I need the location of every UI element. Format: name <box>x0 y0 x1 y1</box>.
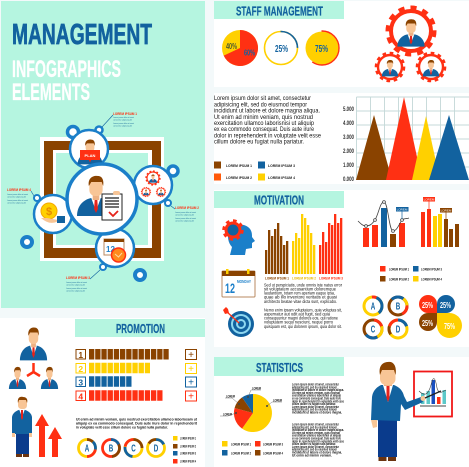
icon: coin in hand <box>34 195 72 233</box>
combo chart: LOREM <box>397 208 408 212</box>
legend: LOREM IPSUM 3 <box>268 164 295 168</box>
promotion legend: LOREM IPSUM 1 <box>180 436 196 440</box>
triangle chart <box>343 97 469 183</box>
promotion legend: LOREM IPSUM 3 <box>180 452 196 456</box>
ring letters: C <box>371 324 375 336</box>
statistics text column one: dolor in reprehenderit in voluptate velit esse <box>292 399 344 403</box>
presentation board <box>414 372 452 416</box>
ring c <box>125 440 142 456</box>
callout: lorem ipsum 1: Lorem ipsum dolor sit amet <box>113 116 134 119</box>
ring d <box>389 320 407 338</box>
panel: staff management <box>214 1 469 87</box>
heading: promotion <box>75 319 205 337</box>
ring c <box>364 320 382 338</box>
progress row 2: 2 <box>78 364 83 374</box>
statistics text column one: incididunt ut labore et dolore magna. <box>292 410 342 414</box>
body text: exercitation ullamco laborisnisi ut aliquip <box>214 121 315 127</box>
callout: lorem ipsum 1: LOREM IPSUM 1 <box>113 112 137 116</box>
progress row 4: 4 <box>78 391 83 401</box>
callout: lorem ipsum 4: consectetur adipiscing elit <box>7 196 26 198</box>
callout: lorem ipsum 4 <box>7 188 31 204</box>
callout: lorem ipsum 1: consectetur adipiscing elit <box>113 118 132 122</box>
callout: lorem ipsum 1 <box>113 112 137 128</box>
progress row 2 <box>76 364 196 375</box>
motivation paragraph one: Sed ut perspiciatis, unde omnis iste natus error <box>264 282 343 288</box>
progress row 1: 1 <box>78 350 83 360</box>
bar labels: LOREM IPSUM 2 <box>292 276 316 280</box>
ring letters: B <box>396 302 400 312</box>
callout: lorem ipsum 2: consectetur adipiscing elit <box>175 220 194 222</box>
motivation paragraph two: quisquam est, qui dolorem ipsum, quia dolor sit. <box>264 324 342 329</box>
chart legend: LOREM IPSUM 4 <box>421 278 442 282</box>
ring chart: 25 percent: 25% <box>275 44 288 55</box>
pie chart: 40 and 60 percent: 60% <box>244 48 255 58</box>
body text: adipisicing elit, sed do eiusmod tempor <box>214 102 307 108</box>
legend: LOREM IPSUM 4 <box>268 176 295 180</box>
petal chart: 25% <box>422 318 433 328</box>
statistics text column one: incididunt ut labore et dolore magna aliqua. <box>292 388 344 392</box>
body text <box>214 96 322 146</box>
icon: calendar: 12 <box>225 280 235 296</box>
ring letters: C <box>131 444 136 454</box>
ring letters: A <box>371 302 375 312</box>
callout: lorem ipsum 4: consectetur adipiscing elit <box>7 202 26 204</box>
triangle chart: 2.000 <box>343 149 354 155</box>
panel: text and triangle chart <box>214 93 469 184</box>
bar labels: LOREM IPSUM 1 <box>265 276 289 280</box>
chart legend: LOREM IPSUM 2 <box>389 278 409 282</box>
callout leaders <box>31 115 175 279</box>
icon: team gears <box>134 166 172 204</box>
callout: lorem ipsum 3: Lorem ipsum dolor sit amet <box>66 281 87 284</box>
statistics text column two: Ut enim ad minim veniam, quis nostrud <box>292 431 340 435</box>
heading: statistics: STATISTICS <box>256 360 303 375</box>
statistics text column one: exercitation ullamco laborisnisi ut aliquip <box>292 394 341 398</box>
icon: calendar and clock: 12 <box>106 245 115 254</box>
body text: incididunt ut labore et dolore magna aliqua. <box>214 108 320 114</box>
promotion text block <box>76 418 198 430</box>
bar labels <box>265 276 343 280</box>
ring letters <box>85 444 158 454</box>
callout: lorem ipsum 2: Lorem ipsum dolor sit amet <box>175 211 196 214</box>
promotion legend: LOREM IPSUM 4 <box>180 460 196 464</box>
ring letters: B <box>109 444 113 454</box>
statistics text column two: ex ea commodo consequat. Duis aute irure <box>292 436 341 440</box>
callout: lorem ipsum 3: consectetur adipiscing elit <box>66 290 85 292</box>
progress row 1: + <box>188 350 194 361</box>
triangle chart: 3.000 <box>343 135 354 141</box>
square frame <box>40 137 164 261</box>
statistics text column one: cillum dolore eu fugiat nulla pariatur. <box>292 402 336 406</box>
icon: plan manager <box>70 130 108 168</box>
ring letters: A <box>85 444 89 454</box>
callout: lorem ipsum 3: consectetur adipiscing elit <box>66 284 85 286</box>
bar labels: LOREM IPSUM 3 <box>319 276 343 280</box>
body text: cillum dolore eu fugiat nulla pariatur. <box>214 140 304 146</box>
icon: target <box>223 307 254 337</box>
bar chart: brown <box>265 223 288 274</box>
promotion legend: LOREM IPSUM 2 <box>180 444 196 448</box>
heading: staff management <box>214 1 344 19</box>
statistics text column two <box>292 422 344 457</box>
triangle chart: 1.000 <box>343 163 354 169</box>
heading: staff management: STAFF MANAGEMENT <box>236 4 323 18</box>
promotion text block: aliquip ex ea commodo consequat. Duis aute irure dolor in reprehenderit <box>76 422 198 426</box>
panel: motivation <box>214 190 469 347</box>
statistics text column two: adipisicing elit, sed do eiusmod tempor <box>292 448 337 452</box>
pie chart: 40 and 60 percent: 40% <box>226 42 237 51</box>
ring letters: D <box>154 444 158 454</box>
triangle chart: 4.000 <box>343 121 354 127</box>
pie chart: LOREM <box>252 386 261 390</box>
callout bar chart: LOREM <box>424 198 435 202</box>
icon: calendar: MONDAY <box>237 279 251 284</box>
callout: lorem ipsum 3: Lorem ipsum dolor sit amet <box>66 287 87 290</box>
presenter <box>371 362 441 461</box>
icon: standing man <box>12 397 32 457</box>
statistics text column two: Lorem ipsum dolor sit amet, consectetur <box>292 422 339 426</box>
pie chart: LOREM <box>223 412 232 416</box>
statistics text column two: incididunt ut labore et dolore magna aliqua. <box>292 428 344 432</box>
pie legend: LOREM IPSUM 4 <box>263 452 283 456</box>
callout: lorem ipsum 2 <box>175 206 199 222</box>
promotion legend <box>173 436 196 464</box>
body text: Lorem ipsum dolor sit amet, consectetur <box>214 96 311 102</box>
decorative rings <box>22 126 178 280</box>
legend: LOREM IPSUM 1 <box>226 164 252 168</box>
ring a <box>78 440 96 456</box>
motivation paragraph two: consequuntur magni dolores eos, qui ratione <box>264 316 339 320</box>
petal chart: 25% <box>422 300 433 310</box>
callout: lorem ipsum 4: LOREM IPSUM 4 <box>7 188 31 192</box>
heading: motivation: MOTIVATION <box>254 192 304 208</box>
ring chart: 75 percent <box>305 31 339 65</box>
motivation paragraph one <box>264 282 343 304</box>
chart legend: LOREM IPSUM 3 <box>421 268 442 272</box>
motivation paragraph two: Nemo enim ipsam voluptatem, quia voluptas sit, <box>264 308 342 312</box>
callout bar chart <box>421 197 459 247</box>
progress row 3 <box>76 377 196 388</box>
chart legend <box>380 266 442 282</box>
bar chart: red <box>319 214 342 274</box>
progress row 2: + <box>188 364 194 375</box>
promotion text block: in voluptate velit esse cillum dolore eu fugiat nulla pariatur. <box>76 426 168 430</box>
motivation paragraph two <box>264 308 342 329</box>
statistics text column two: exercitation ullamco laborisnisi ut aliquip <box>292 434 341 438</box>
ring a <box>364 297 382 315</box>
body text: dolor in reprehenderit in voluptate velit esse <box>214 133 322 139</box>
petal chart: 25% <box>440 300 451 310</box>
ring letters: D <box>396 324 400 336</box>
statistics text column two: Ut enim ad minim veniam. <box>292 453 332 457</box>
callout: lorem ipsum 3: LOREM IPSUM 3 <box>66 276 90 280</box>
statistics text column one <box>292 382 344 414</box>
pie chart: LOREM <box>273 398 282 402</box>
icon: coin in hand: $ <box>46 206 52 218</box>
statistics text column one: Ut enim ad minim veniam, quis nostrud <box>292 391 340 395</box>
chart legend: LOREM IPSUM 1 <box>389 268 409 272</box>
bar chart: yellow <box>292 214 315 274</box>
heading: motivation <box>214 191 344 208</box>
callout: lorem ipsum 4: Lorem ipsum dolor sit amet <box>7 193 28 196</box>
pie chart <box>220 386 282 432</box>
panel: poster <box>1 1 205 308</box>
pie chart: 40 and 60 percent <box>222 30 258 66</box>
callout: lorem ipsum 2: consectetur adipiscing elit <box>175 214 194 216</box>
statistics text column one: adipisicing elit, sed do eiusmod tempor <box>292 385 337 389</box>
progress row 4: + <box>188 392 194 402</box>
progress row 1 <box>76 350 196 361</box>
panel: promotion <box>0 318 205 467</box>
promotion text block: Ut enim ad minim veniam, quis nostrud exercitation ullamco laboriosam ut <box>76 418 198 422</box>
ring b <box>389 297 407 315</box>
combo chart <box>358 201 409 247</box>
callout: lorem ipsum 3 <box>66 276 90 292</box>
motivation paragraph one: architecto beatae vitae dicta sunt, explicabo. <box>264 299 337 304</box>
pie chart: LOREM <box>226 394 235 398</box>
statistics text column one: Lorem ipsum dolor sit amet, consectetur <box>292 405 339 409</box>
ring chart: 75 percent: 75% <box>315 44 328 55</box>
panel: statistics <box>214 357 469 467</box>
body text: ex ea commodo consequat. Duis aute irure <box>214 127 315 133</box>
statistics text column two: Lorem ipsum dolor sit amet, consectetur <box>292 445 339 449</box>
ring letters <box>371 302 400 336</box>
petal chart: 75% <box>444 321 455 331</box>
progress row 3: 3 <box>78 377 83 387</box>
subtitle line one: INFOGRAPHICS <box>12 56 121 83</box>
statistics text column one: adipisicing elit, sed do eiusmod tempor <box>292 408 337 412</box>
ring b <box>102 440 120 456</box>
callout bar chart: LOREM <box>441 208 452 212</box>
triangle chart: 5.000 <box>343 107 354 113</box>
ring d <box>148 440 164 456</box>
callout: lorem ipsum 2: Lorem ipsum dolor sit amet <box>175 217 196 220</box>
statistics text column two: adipisicing elit, sed do eiusmod tempor <box>292 425 337 429</box>
icon: calendar and clock <box>96 229 134 267</box>
subtitle line two: ELEMENTS <box>12 79 90 106</box>
icon: head with gear <box>224 220 255 255</box>
icon: central manager with document <box>67 164 137 234</box>
statistics text column two: incididunt ut labore et dolore magna. <box>292 450 342 454</box>
icon: calendar <box>222 269 255 297</box>
progress row 4 <box>76 391 196 402</box>
pie legend: LOREM IPSUM 3 <box>263 442 283 446</box>
statistics text column two: dolor in reprehenderit in voluptate velit esse <box>292 439 344 443</box>
legend: LOREM IPSUM 2 <box>226 176 252 180</box>
ring chart: 25 percent <box>264 32 298 64</box>
motivation paragraph one: sit voluptatem accusantium doloremque <box>264 286 337 292</box>
petal chart <box>419 295 462 338</box>
statistics text column one: Lorem ipsum dolor sit amet, consectetur <box>292 382 339 386</box>
statistics text column one: ex ea commodo consequat. Duis aute irure <box>292 396 341 400</box>
icon: up arrows <box>35 414 62 457</box>
title: MANAGEMENT <box>12 19 152 51</box>
pie legend <box>222 441 283 456</box>
heading: promotion: PROMOTION <box>116 321 165 336</box>
heading: statistics <box>214 357 344 376</box>
icon: plan manager: PLAN <box>85 153 96 158</box>
motivation paragraph two: voluptatem sequi nesciunt, neque porro <box>264 320 334 324</box>
pie legend: LOREM IPSUM 2 <box>231 452 251 456</box>
icon: team hierarchy <box>9 327 58 389</box>
motivation paragraph one: laudantium, totam rem aperiam eaque ipsa, <box>264 290 335 296</box>
legend <box>214 162 295 180</box>
pie legend: LOREM IPSUM 1 <box>231 442 251 446</box>
motivation paragraph one: quae ab illo inventore veritatis et quasi <box>264 294 337 300</box>
body text: Ut enim ad minim veniam, quis nostrud <box>214 115 313 121</box>
callout: lorem ipsum 4: Lorem ipsum dolor sit amet <box>7 199 28 202</box>
callout: lorem ipsum 1: consectetur adipiscing elit <box>113 124 132 128</box>
callout: lorem ipsum 2: LOREM IPSUM 2 <box>175 206 199 210</box>
statistics text column two: cillum dolore eu fugiat nulla pariatur. <box>292 442 336 446</box>
motivation paragraph two: aspernatur aut odit aut fugit, sed quia <box>264 312 331 316</box>
icon: staff gears <box>376 8 445 81</box>
callout: lorem ipsum 1: Lorem ipsum dolor sit amet <box>113 122 134 125</box>
triangle chart: 0.000 <box>343 177 354 183</box>
progress row 3: + <box>188 378 194 388</box>
